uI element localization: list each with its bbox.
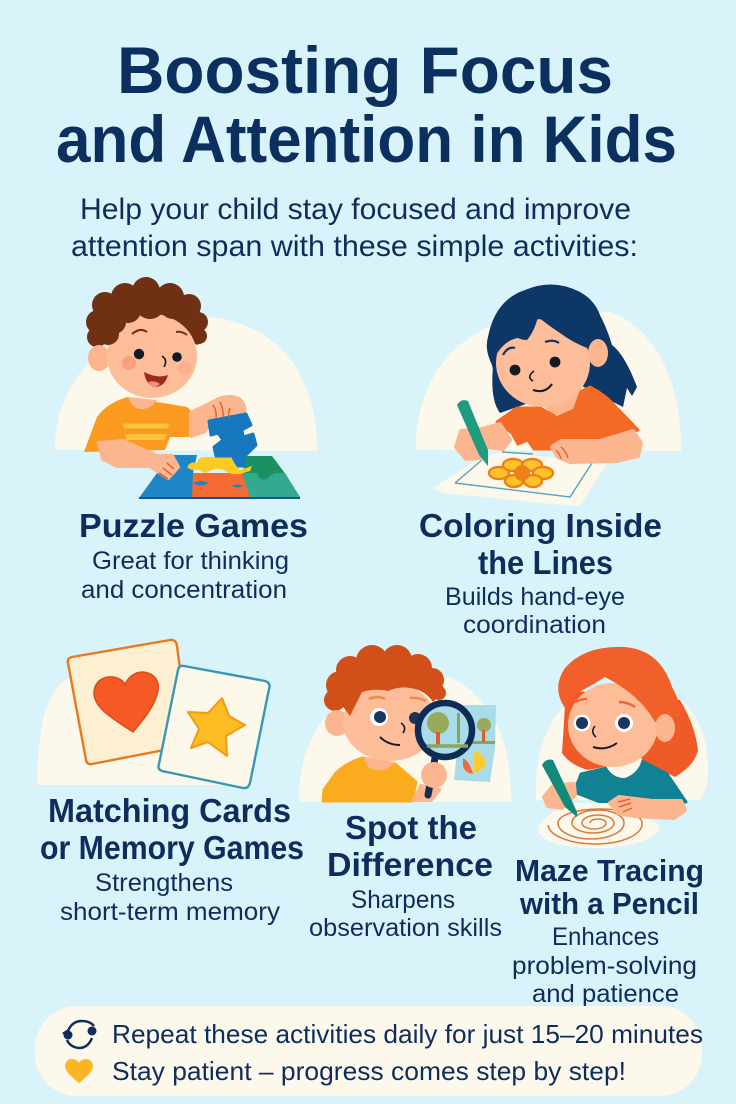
front arm <box>99 441 178 478</box>
fringe curls <box>97 289 199 345</box>
title: Boosting Focus <box>117 33 613 107</box>
raised arm <box>191 397 244 436</box>
illustration: boy doing puzzle <box>55 277 317 499</box>
heading: with a Pencil <box>519 886 699 921</box>
hair fringe <box>558 647 680 722</box>
description: Sharpens <box>351 886 455 914</box>
panel: spot the difference <box>299 645 511 942</box>
ear <box>655 714 675 742</box>
illustration: girl coloring <box>416 284 681 506</box>
description: Strengthens <box>95 869 233 897</box>
eyes <box>370 708 388 726</box>
description <box>60 869 281 926</box>
heading: Puzzle Games <box>79 507 308 544</box>
description: Builds hand-eye <box>445 583 625 611</box>
description: Enhances <box>552 923 659 951</box>
illustration: boy with magnifying glass <box>299 645 511 802</box>
panel: tips footer <box>35 1006 703 1096</box>
description <box>81 547 289 604</box>
shirt <box>84 397 193 452</box>
shirt <box>574 761 686 805</box>
description: short-term memory <box>60 898 281 926</box>
description <box>309 886 502 942</box>
panel: puzzle games <box>55 277 317 604</box>
description: Great for thinking <box>92 547 289 575</box>
tip text: repeat: Repeat these activities daily for just 15–20 minutes <box>112 1019 703 1049</box>
description: observation skills <box>309 914 502 942</box>
description: coordination <box>463 611 606 639</box>
right arm and hand <box>610 797 685 818</box>
maze paper <box>538 803 660 848</box>
hand <box>421 762 447 788</box>
heading <box>419 507 662 581</box>
description <box>512 923 697 1008</box>
left hand <box>544 784 575 808</box>
subtitle: attention span with these simple activities: <box>71 230 638 263</box>
shirt <box>497 387 638 449</box>
face <box>134 349 144 359</box>
puzzle board <box>139 455 300 499</box>
heading <box>327 809 493 883</box>
collar <box>606 758 642 778</box>
heading: Difference <box>327 846 493 883</box>
subtitle <box>71 193 638 263</box>
panel: maze tracing <box>512 647 708 1008</box>
head <box>107 314 197 398</box>
right arm and hand <box>552 431 641 462</box>
subtitle: Help your child stay focused and improve <box>80 193 631 226</box>
card: heart <box>68 640 190 764</box>
illustration: girl tracing maze <box>536 647 708 848</box>
back curls of hair <box>86 277 208 347</box>
picture <box>454 705 496 782</box>
heading: Coloring Inside <box>419 507 662 544</box>
heading <box>40 792 304 866</box>
ear <box>88 345 110 371</box>
face <box>510 365 520 375</box>
title <box>56 33 677 176</box>
neck <box>364 757 395 770</box>
neck <box>128 397 157 409</box>
description: problem-solving <box>512 952 697 980</box>
heading: Spot the <box>345 809 477 846</box>
heading: Matching Cards <box>48 792 291 829</box>
shirt <box>323 758 416 801</box>
description <box>445 583 625 639</box>
neck <box>538 390 580 416</box>
hair fringe <box>489 285 600 370</box>
hair back <box>487 284 637 413</box>
finger lines <box>213 402 230 418</box>
heading: the Lines <box>478 544 613 581</box>
panel: coloring inside the lines <box>416 284 681 639</box>
tip text: patience: Stay patient – progress comes step by step! <box>112 1056 626 1086</box>
face <box>574 714 590 732</box>
heading: Maze Tracing <box>515 853 704 888</box>
title: and Attention in Kids <box>56 102 677 176</box>
hair back <box>562 690 698 777</box>
ear <box>588 339 608 367</box>
description: and patience <box>532 980 679 1008</box>
fringe <box>338 665 445 716</box>
magnifying glass <box>418 703 472 795</box>
illustration: memory cards <box>38 640 269 788</box>
head <box>568 683 658 767</box>
panel: matching cards <box>38 640 304 926</box>
arm <box>414 786 439 800</box>
flower <box>489 459 553 487</box>
ear <box>325 710 349 736</box>
head <box>496 319 590 407</box>
heading <box>515 853 704 921</box>
crayon <box>542 760 577 817</box>
card: star <box>158 666 270 788</box>
hair curls <box>324 645 446 711</box>
crayon <box>457 400 488 466</box>
description: and concentration <box>81 576 287 604</box>
heading: or Memory Games <box>40 829 304 866</box>
left arm and hand <box>456 424 510 459</box>
loose blue puzzle piece <box>209 414 256 466</box>
head <box>343 683 437 761</box>
paper <box>433 452 607 506</box>
icon: repeat arrows <box>62 1021 96 1048</box>
icon: heart <box>65 1059 93 1083</box>
